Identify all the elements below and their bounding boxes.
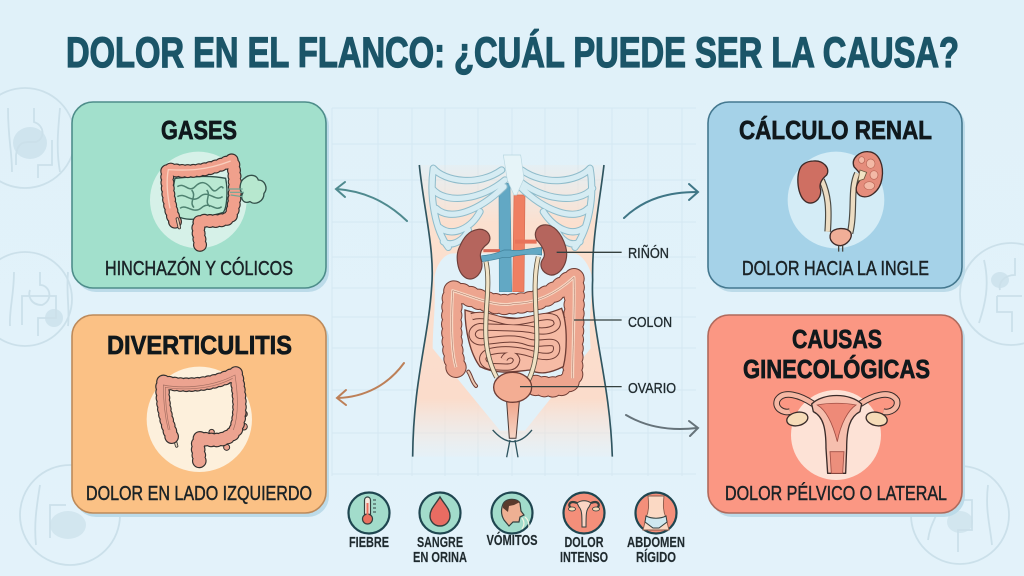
- heading: causas ginecológicas: GINECOLÓGICAS: [743, 354, 930, 384]
- arrow: to diverticulitis: [337, 363, 404, 405]
- heading: causas ginecológicas: CAUSAS: [792, 324, 882, 354]
- heading: cálculo renal: CÁLCULO RENAL: [739, 115, 932, 145]
- leader lines: [520, 252, 622, 387]
- symptom: dolor intenso: INTENSO: [560, 550, 608, 566]
- spine vessels: [482, 183, 542, 292]
- symptom: abdomen rígido: [627, 492, 685, 566]
- icon: kidneys and bladder: [788, 152, 884, 252]
- arrow: to cálculo renal: [624, 184, 698, 218]
- arrow: to causas ginecológicas: [626, 415, 698, 436]
- colon: [452, 277, 574, 387]
- background grid: [332, 108, 696, 476]
- label: colon: COLON: [628, 314, 672, 331]
- heading: causas ginecológicas: [743, 324, 930, 384]
- caption: causas ginecológicas: DOLOR PÉLVICO O LATERAL: [725, 482, 947, 505]
- caption: diverticulitis: DOLOR EN LADO IZQUIERDO: [86, 483, 312, 505]
- kidneys: [457, 225, 567, 279]
- icon: colon with gas: [150, 152, 266, 248]
- abdomen background: [433, 253, 593, 431]
- symptom: vómitos: VÓMITOS: [486, 531, 538, 549]
- symptom: dolor intenso: DOLOR: [564, 535, 604, 551]
- panel: causas ginecológicas: [708, 315, 965, 517]
- panel: diverticulitis: [72, 315, 329, 517]
- symptom: vómitos: [486, 492, 538, 549]
- panel: gases: [72, 102, 329, 292]
- symptom: fiebre: [348, 492, 390, 551]
- symptom: abdomen rígido: RÍGIDO: [636, 549, 676, 566]
- caption: gases: HINCHAZÓN Y CÓLICOS: [105, 257, 293, 280]
- panel: cálculo renal: [708, 102, 965, 292]
- symptom: abdomen rígido: ABDOMEN: [627, 535, 685, 551]
- ureters: [486, 257, 538, 381]
- body outline: [413, 165, 612, 457]
- icon: colon with diverticula: [147, 367, 252, 472]
- arrow: to gases: [336, 182, 407, 221]
- symptom: dolor intenso: [560, 492, 608, 566]
- rib cage: [432, 155, 593, 247]
- label: ovario: OVARIO: [628, 380, 676, 397]
- central anatomy diagram: [413, 155, 622, 457]
- caption: cálculo renal: DOLOR HACIA LA INGLE: [742, 258, 929, 280]
- watermark: right top: [960, 243, 1024, 345]
- body skin: [413, 165, 612, 457]
- watermark: left middle: [0, 252, 72, 346]
- symptom: sangre en orina: EN ORINA: [413, 550, 467, 566]
- heading: diverticulitis: DIVERTICULITIS: [107, 330, 292, 360]
- symptom: sangre en orina: [413, 492, 467, 566]
- watermark: left bottom: [20, 465, 120, 565]
- symptom: fiebre: FIEBRE: [349, 535, 389, 551]
- label: riñón: RIÑÓN: [628, 245, 669, 262]
- icon: uterus: [777, 390, 897, 480]
- watermark: left top: [0, 88, 75, 188]
- bladder: [493, 372, 532, 457]
- small intestine: [465, 308, 566, 373]
- symptom: sangre en orina: SANGRE: [417, 535, 463, 551]
- watermark: right bottom: [911, 466, 1009, 564]
- heading: gases: GASES: [161, 115, 237, 145]
